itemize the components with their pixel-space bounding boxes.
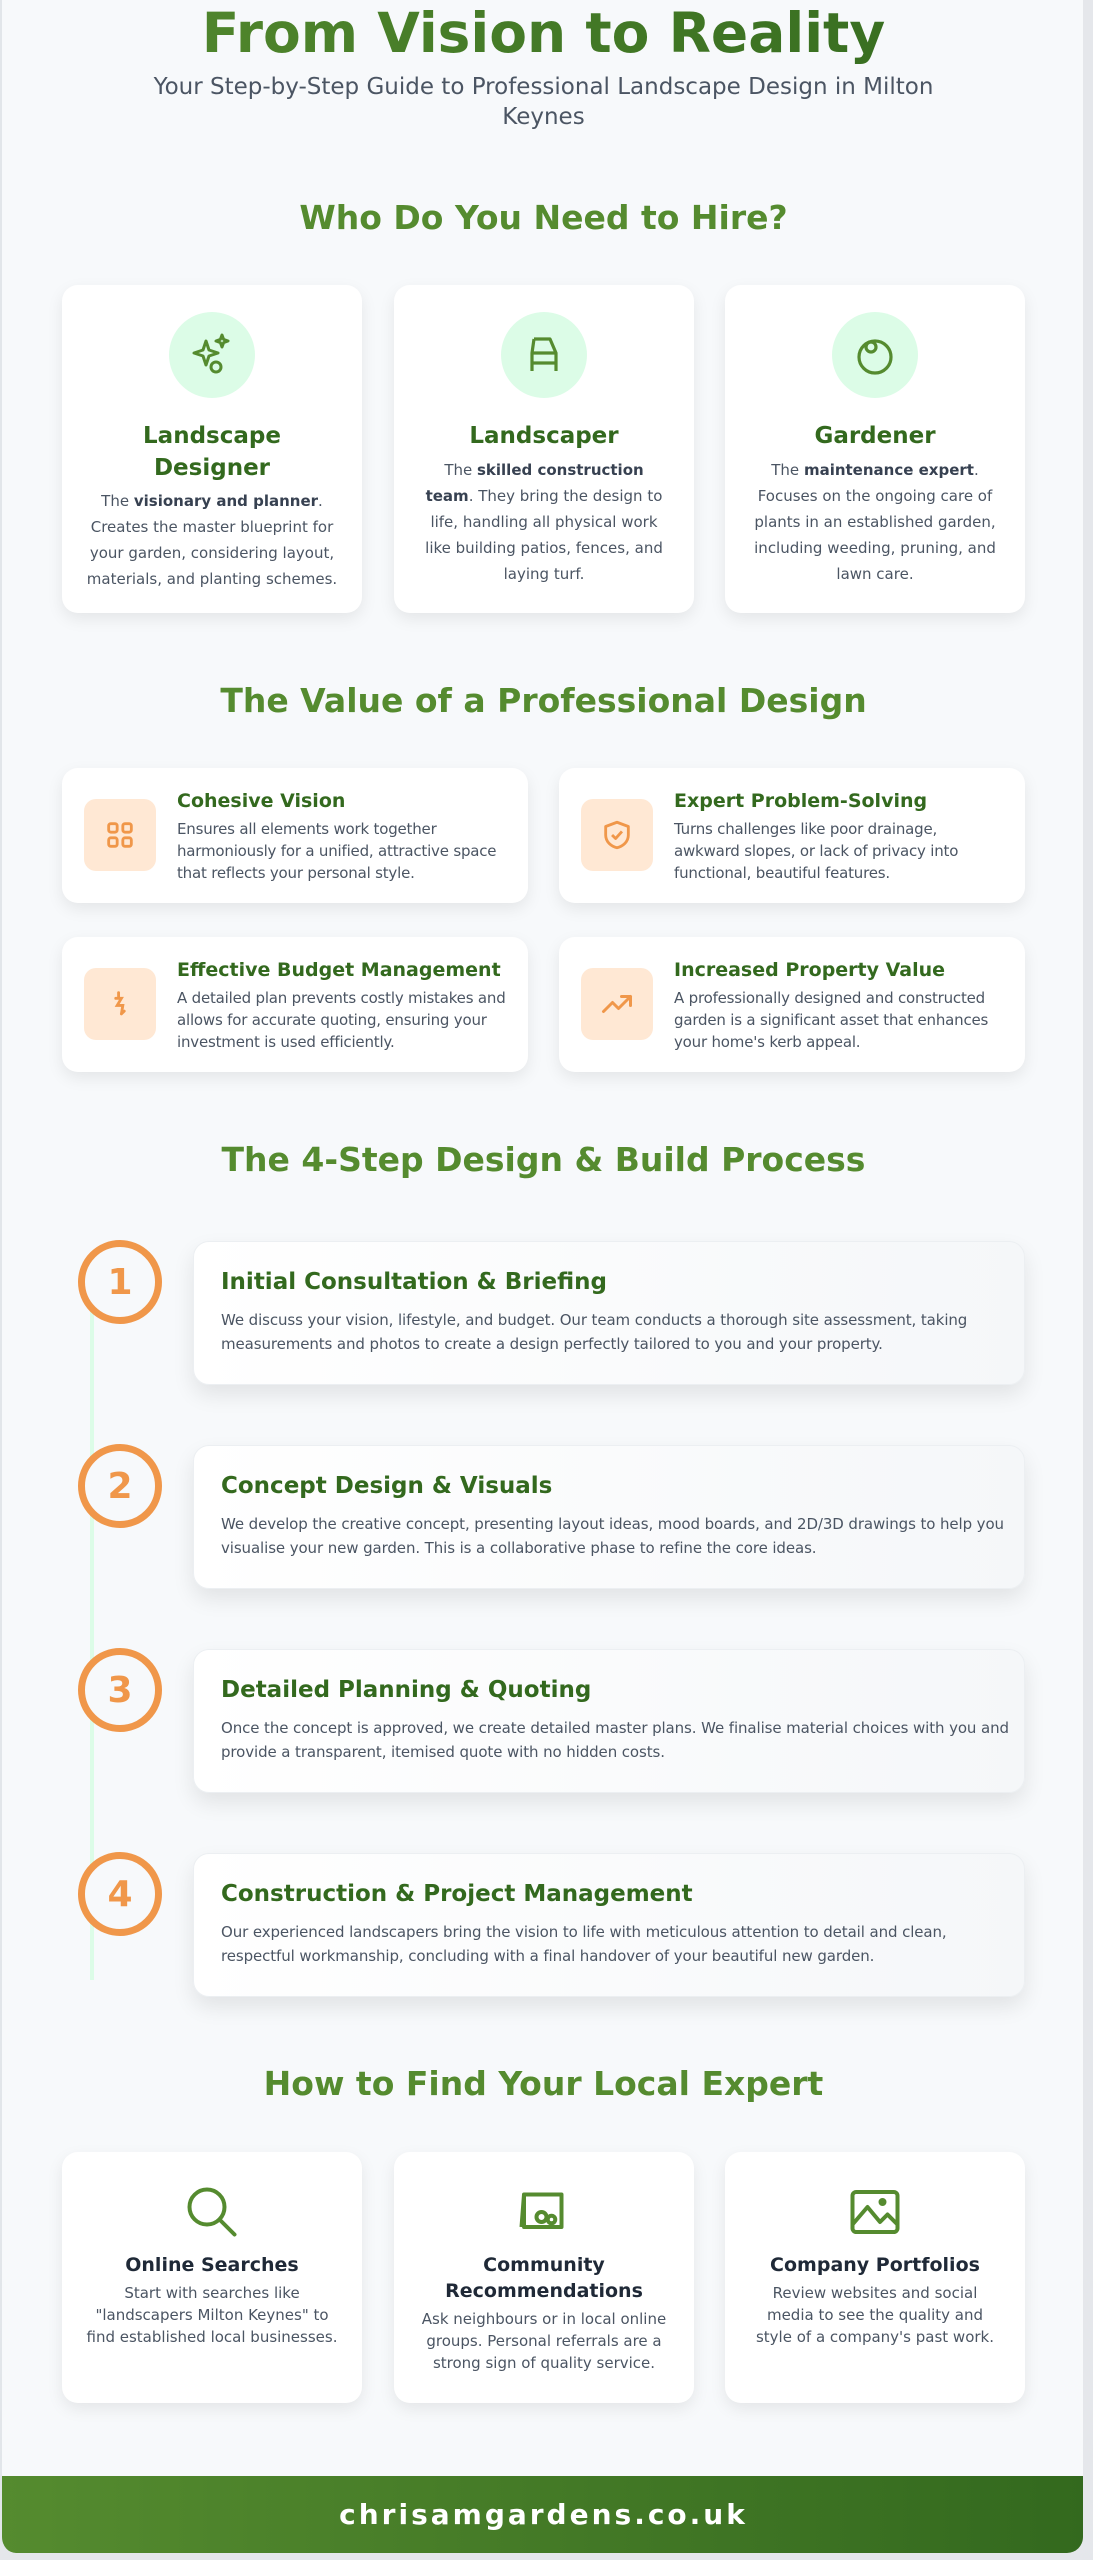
- icon: shield: [581, 799, 653, 871]
- heading: value: The Value of a Professional Design: [220, 681, 867, 720]
- icon: sparkles: [169, 312, 255, 398]
- card: landscape designer: The visionary and planner. Creates the master blueprint for your garden, considering layout, materials, and planting schemes.: [87, 492, 337, 588]
- card: community: Ask neighbours or in local online groups. Personal referrals are a strong sign of quality service.: [422, 2310, 666, 2372]
- step 1: [193, 1241, 1025, 1385]
- card: community: Recommendations: [445, 2280, 643, 2302]
- footer: [2, 2476, 1085, 2553]
- card: budget: A detailed plan prevents costly mistakes and allows for accurate quoting, ensuring your investment is used efficiently.: [177, 989, 506, 1051]
- card: online searches: Online Searches: [125, 2254, 299, 2276]
- card: community: Community: [483, 2254, 605, 2276]
- icon: grid: [84, 799, 156, 871]
- icon: wheelbarrow: [501, 312, 587, 398]
- number 1: [78, 1240, 162, 1324]
- number 4: 4: [107, 1874, 133, 1914]
- card: landscaper: The skilled construction team. They bring the design to life, handling all physical work like building patios, fences, and laying turf.: [425, 461, 663, 583]
- icon: trend up: [581, 968, 653, 1040]
- card: gardener: Gardener: [814, 423, 936, 449]
- heading: process: The 4-Step Design & Build Process: [222, 1140, 865, 1179]
- step 1: Initial Consultation & Briefing: [221, 1269, 607, 1295]
- card: property value: A professionally designed and constructed garden is a significant asset that enhances your home's kerb appeal.: [674, 989, 988, 1051]
- timeline line: [90, 1290, 94, 1980]
- card: property value: Increased Property Value: [674, 959, 945, 981]
- card: cohesive vision: Cohesive Vision: [177, 790, 345, 812]
- icon: image: [850, 2190, 900, 2234]
- card: cohesive vision: Ensures all elements work together harmoniously for a unified, attractive space that reflects your personal style.: [177, 820, 496, 882]
- step 4: Construction & Project Management: [221, 1881, 693, 1907]
- step 1: We discuss your vision, lifestyle, and budget. Our team conducts a thorough site assessment, taking measurements and photos to create a design perfectly tailored to you and your property.: [221, 1311, 967, 1353]
- icon: money: [84, 968, 156, 1040]
- number 1: 1: [107, 1262, 133, 1302]
- step 2: [193, 1445, 1025, 1589]
- title: From Vision to Reality: [202, 1, 885, 65]
- card: online searches: [62, 2152, 362, 2403]
- card: budget: Effective Budget Management: [177, 959, 501, 981]
- icon: plant: [832, 312, 918, 398]
- step 4: Our experienced landscapers bring the vision to life with meticulous attention to detail and clean, respectful workmanship, concluding with a final handover of your beautiful new garden.: [221, 1923, 947, 1965]
- card: gardener: [725, 285, 1025, 613]
- card: online searches: Start with searches like "landscapers Milton Keynes" to find established local businesses.: [87, 2284, 337, 2346]
- card: landscaper: [394, 285, 694, 613]
- card: landscape designer: [62, 285, 362, 613]
- number 3: 3: [107, 1670, 133, 1710]
- card: portfolios: Review websites and social media to see the quality and style of a company's past work.: [756, 2284, 994, 2346]
- footer: chrisamgardens.co.uk: [339, 2498, 748, 2531]
- step 2: We develop the creative concept, presenting layout ideas, mood boards, and 2D/3D drawings to help you visualise your new garden. This is a collaborative phase to refine the core ideas.: [221, 1515, 1004, 1557]
- icon: search: [188, 2188, 237, 2237]
- subtitle: Your Step-by-Step Guide to Professional Landscape Design in Milton Keynes: [154, 74, 933, 130]
- step 2: Concept Design & Visuals: [221, 1473, 552, 1499]
- step 4: [193, 1853, 1025, 1997]
- card: expert problem solving: Expert Problem-Solving: [674, 790, 927, 812]
- card: expert problem solving: Turns challenges like poor drainage, awkward slopes, or lack of privacy into functional, beautiful features.: [674, 820, 958, 882]
- step 3: Once the concept is approved, we create detailed master plans. We finalise material choices with you and provide a transparent, itemised quote with no hidden costs.: [221, 1719, 1009, 1761]
- card: portfolios: [725, 2152, 1025, 2403]
- card: landscaper: Landscaper: [469, 423, 619, 449]
- step 3: [193, 1649, 1025, 1793]
- title: [2, 2, 1085, 64]
- card: gardener: The maintenance expert. Focuses on the ongoing care of plants in an established garden, including weeding, pruning, and lawn care.: [754, 461, 996, 583]
- number 3: [78, 1648, 162, 1732]
- heading: who to hire: Who Do You Need to Hire?: [299, 198, 788, 237]
- number 4: [78, 1852, 162, 1936]
- card: cohesive vision: [62, 768, 528, 903]
- card: expert problem solving: [559, 768, 1025, 903]
- card: portfolios: Company Portfolios: [770, 2254, 980, 2276]
- step 3: Detailed Planning & Quoting: [221, 1677, 591, 1703]
- card: community: [394, 2152, 694, 2403]
- card: landscape designer: Landscape: [143, 423, 281, 449]
- card: budget: [62, 937, 528, 1072]
- heading: find expert: How to Find Your Local Expert: [264, 2064, 823, 2103]
- card: landscape designer: Designer: [154, 455, 270, 481]
- number 2: [78, 1444, 162, 1528]
- card: property value: [559, 937, 1025, 1072]
- number 2: 2: [107, 1466, 133, 1506]
- icon: community: [520, 2192, 564, 2229]
